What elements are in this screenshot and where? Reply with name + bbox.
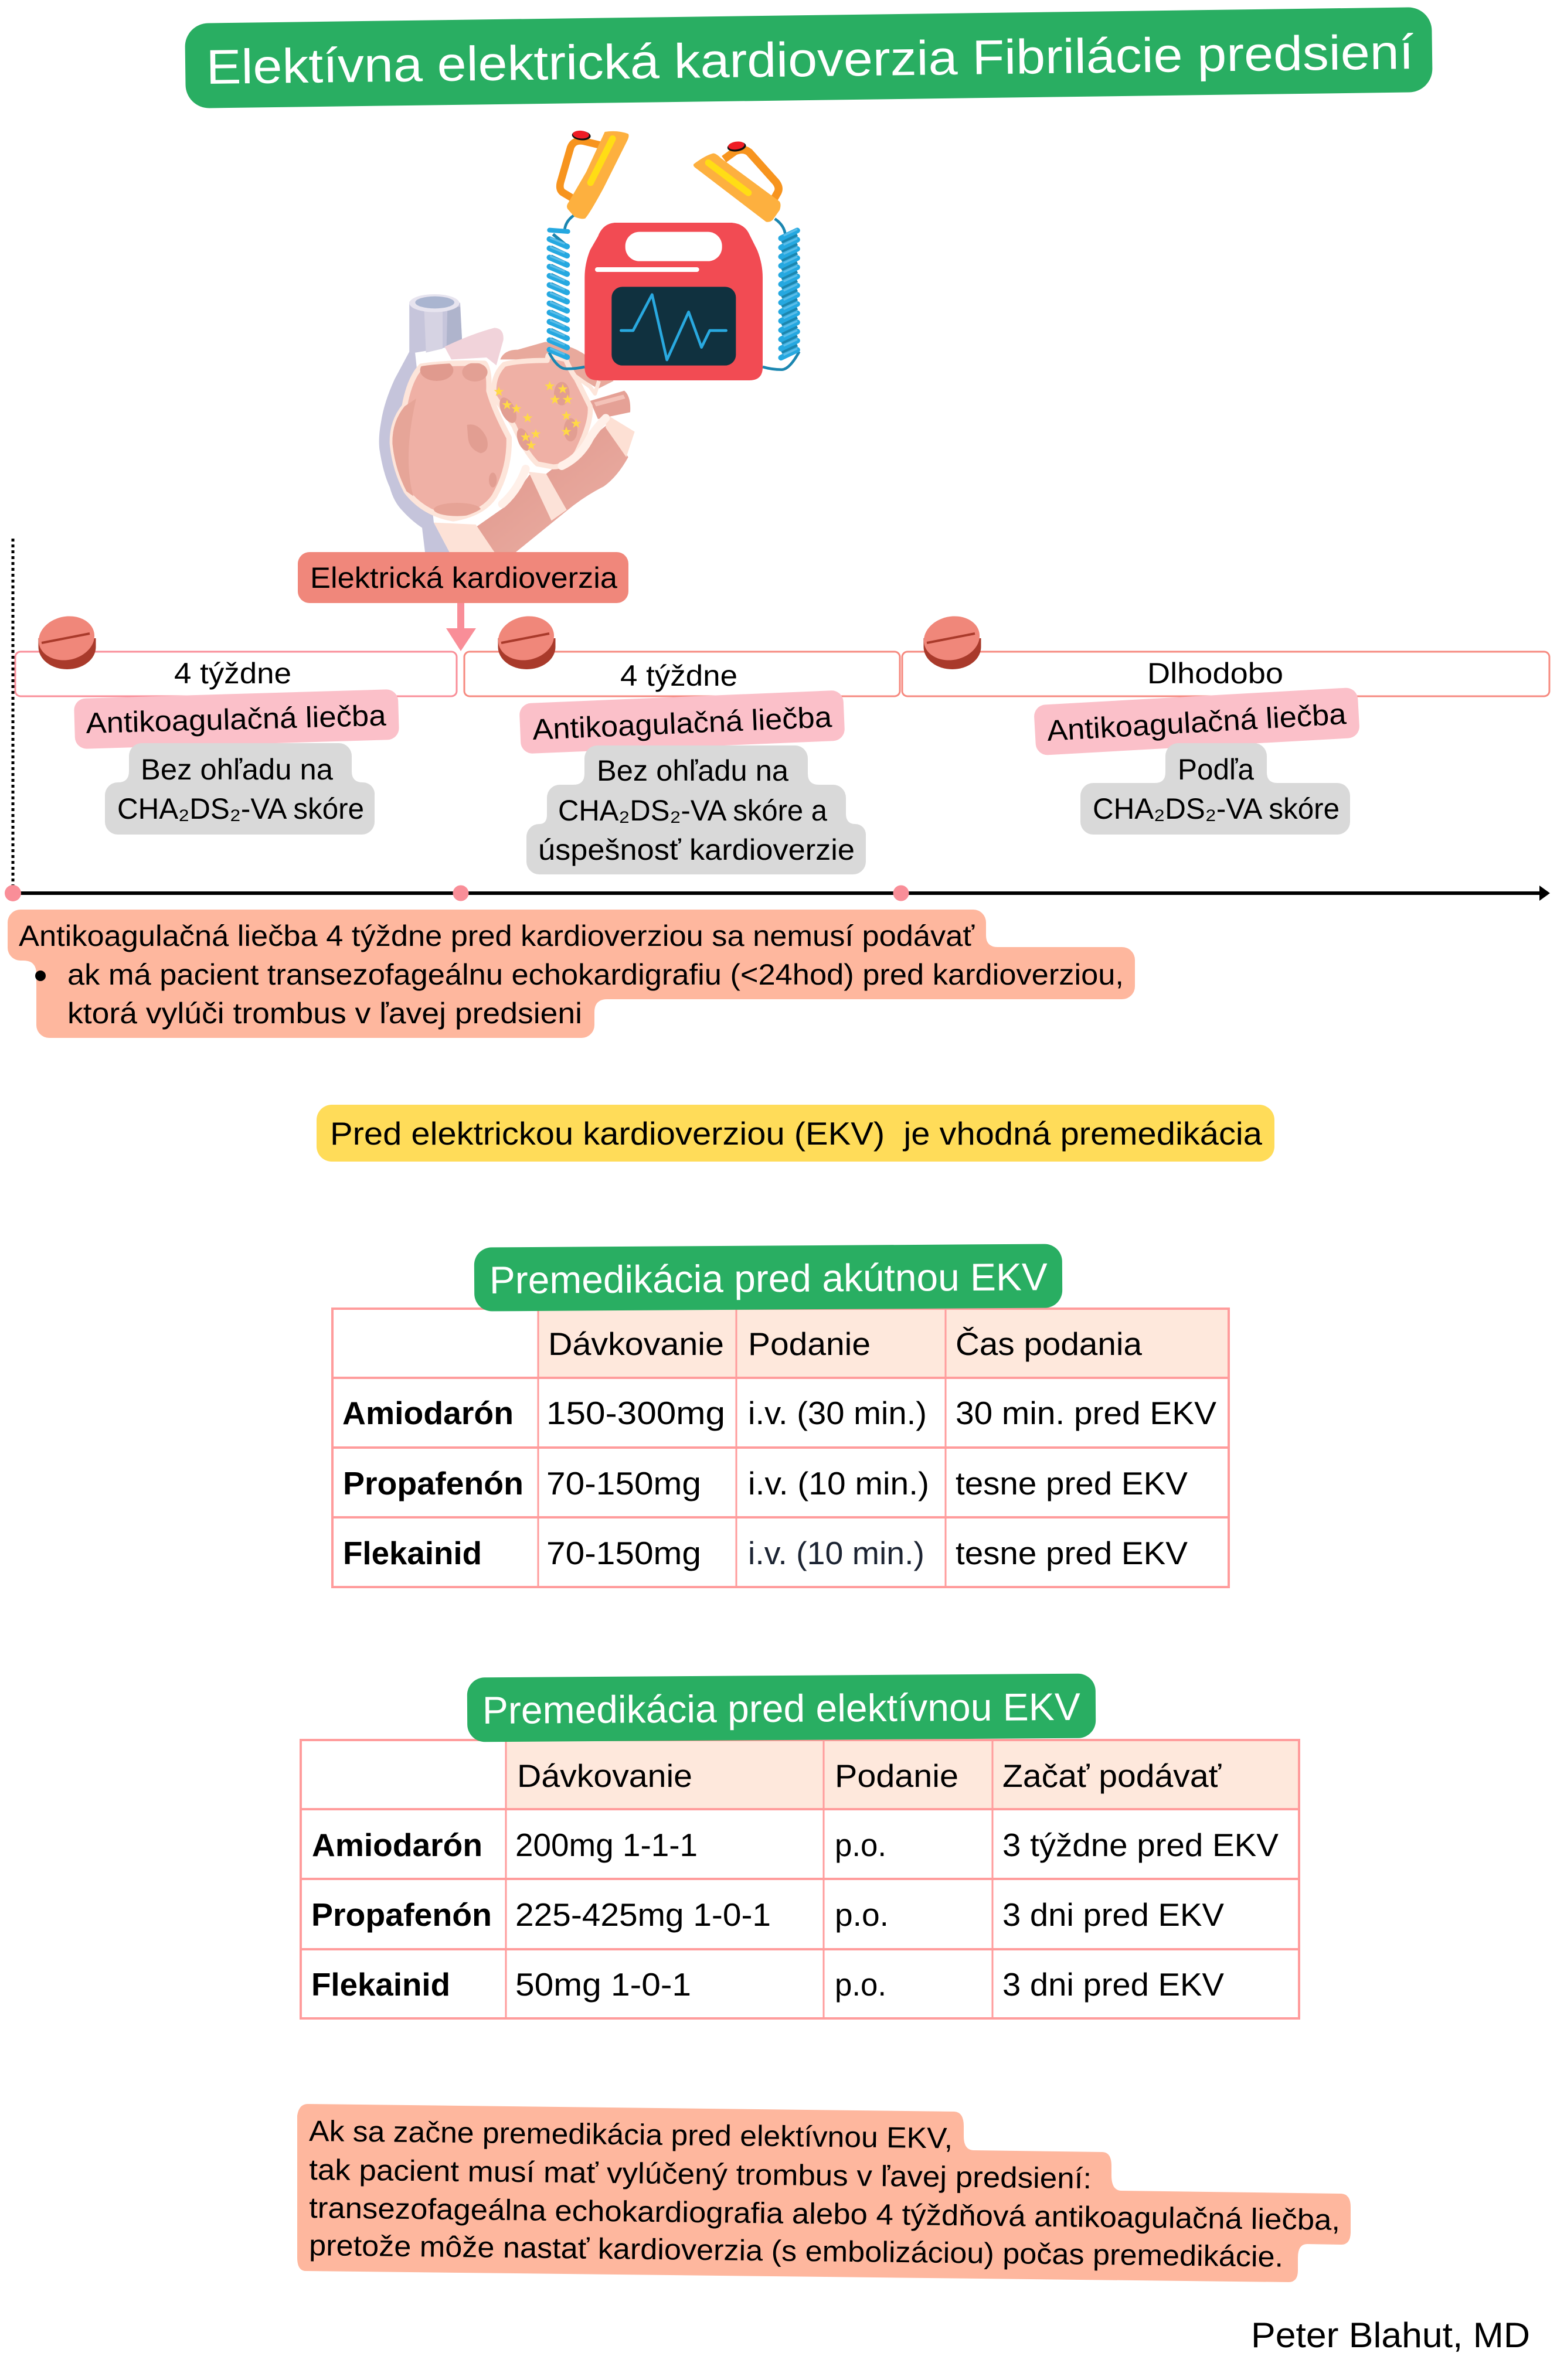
table 1 row: Flekainid: i.v. (10 min.) [748, 1535, 924, 1571]
callout: thrombus exclusion note: tak pacient musí mať vylúčený trombus v ľavej predsiení: [309, 2153, 1092, 2195]
table 1 row: Propafenón [343, 1465, 1188, 1501]
icon: defibrillator with paddles [549, 130, 799, 380]
table 2 header [517, 1758, 1222, 1794]
callout: anticoagulation exception: ktorá vylúči trombus v ľavej predsieni [67, 997, 582, 1030]
table 1 row: Flekainid: 70-150mg [546, 1535, 701, 1571]
table 2 header: Dávkovanie [517, 1758, 692, 1794]
table 1 row: Amiodarón: Amiodarón [342, 1395, 514, 1431]
label: Elektrická kardioverzia [298, 552, 628, 603]
table 2 row: Flekainid [311, 1966, 1224, 2003]
title: Elektívna elektrická kardioverzia Fibrilácie predsiení [206, 25, 1414, 94]
table 2 row: Propafenón [311, 1896, 1224, 1933]
table 1 row: Flekainid: Flekainid [343, 1535, 482, 1571]
table 2 header: Začať podávať [1002, 1758, 1222, 1794]
timeline axis [5, 539, 1550, 901]
table 2 row: Amiodarón [312, 1827, 1279, 1863]
tag: anticoagulation 2 [519, 690, 845, 754]
table 2 row: Propafenón: p.o. [835, 1896, 889, 1933]
note: grey block 2 [526, 745, 866, 874]
tag: anticoagulation 2: Antikoagulačná liečba [532, 700, 832, 746]
period box: first 4 weeks: 4 týždne [174, 657, 291, 690]
table: premedication before acute EKV [332, 1309, 1229, 1587]
table 1 row: Propafenón: i.v. (10 min.) [748, 1465, 929, 1501]
table 2 row: Amiodarón: Amiodarón [312, 1827, 482, 1863]
callout: premedication heading [317, 1105, 1274, 1162]
machine body [584, 223, 763, 380]
note: grey block 3: CHA₂DS₂-VA skóre [1093, 792, 1340, 825]
table 2 row: Flekainid: 3 dni pred EKV [1002, 1966, 1224, 2003]
icon: pill 2 [494, 611, 558, 669]
icon: pill 3 [920, 611, 984, 669]
note: grey block 2: úspešnosť kardioverzie [538, 833, 855, 866]
note: grey block 1: Bez ohľadu na [141, 753, 333, 786]
heading: acute EKV banner [474, 1244, 1062, 1312]
table 2 row: Flekainid: p.o. [835, 1966, 886, 2003]
period box: first 4 weeks [15, 652, 457, 696]
icon: heart anatomy illustration [379, 294, 635, 552]
table 1 header: Podanie [748, 1326, 871, 1362]
note: grey block 2: Bez ohľadu na [597, 754, 788, 787]
label: Elektrická kardioverzia: Elektrická kardioverzia [310, 561, 617, 594]
wires [549, 215, 799, 370]
table 2 row: Flekainid: 50mg 1-0-1 [515, 1966, 691, 2003]
table 1 row: Amiodarón [342, 1395, 1216, 1431]
note: grey block 1 [105, 743, 375, 835]
icon: pill 1 [35, 611, 98, 669]
table 1 row: Propafenón: tesne pred EKV [956, 1465, 1188, 1501]
tag: anticoagulation 3 [1034, 687, 1360, 755]
table 1 header: Čas podania [956, 1326, 1142, 1362]
note: grey block 1: CHA₂DS₂-VA skóre [117, 792, 364, 825]
table 1 row: Propafenón: 70-150mg [546, 1465, 701, 1501]
table 2 row: Propafenón: 225-425mg 1-0-1 [515, 1896, 771, 1933]
period box: long term [902, 652, 1549, 696]
table 2 row: Propafenón: 3 dni pred EKV [1002, 1896, 1224, 1933]
table 2 row: Amiodarón: p.o. [835, 1827, 886, 1863]
callout: thrombus exclusion note: Ak sa začne premedikácia pred elektívnou EKV, [309, 2115, 953, 2154]
period box: second 4 weeks: 4 týždne [620, 659, 737, 692]
note: grey block 2: CHA₂DS₂-VA skóre a [558, 794, 827, 827]
callout: anticoagulation exception: Antikoagulačná liečba 4 týždne pred kardioverziou sa nemusí podávať [19, 920, 975, 952]
callout: anticoagulation exception [8, 910, 1135, 1038]
note: grey block 3 [1080, 743, 1350, 835]
callout: premedication heading: Pred elektrickou kardioverziou (EKV) je vhodná premedikácia [330, 1115, 1262, 1152]
callout: thrombus exclusion note [297, 2104, 1351, 2282]
table 2 row: Flekainid: Flekainid [311, 1966, 450, 2003]
arrow: cardioversion to timeline [446, 603, 476, 651]
table 1 row: Flekainid: tesne pred EKV [956, 1535, 1188, 1571]
table 2 row: Amiodarón: 200mg 1-1-1 [515, 1827, 698, 1863]
right coil [781, 229, 797, 357]
callout: thrombus exclusion note: pretože môže nastať kardioverzia (s embolizáciou) počas premedikácie. [309, 2229, 1283, 2273]
table 2 header: Podanie [835, 1758, 958, 1794]
callout: anticoagulation exception: ak má pacient transezofageálnu echokardigrafiu (<24hod) pred kardioverziou, [67, 958, 1124, 991]
left paddle [560, 130, 629, 219]
callout: thrombus exclusion note: transezofageálna echokardiografia alebo 4 týždňová antikoagulačná liečba, [309, 2191, 1340, 2236]
heading: acute EKV banner: Premedikácia pred akútnou EKV [489, 1255, 1048, 1302]
period box: second 4 weeks [464, 652, 900, 696]
tag: anticoagulation 3: Antikoagulačná liečba [1046, 697, 1347, 747]
table 1 row: Amiodarón: i.v. (30 min.) [748, 1395, 927, 1431]
table 1 row: Amiodarón: 150-300mg [546, 1395, 725, 1431]
monitor [611, 287, 736, 366]
heading: elective EKV banner: Premedikácia pred elektívnou EKV [482, 1685, 1080, 1732]
note: grey block 3: Podľa [1178, 753, 1254, 786]
table 1 header [548, 1326, 1142, 1362]
tag: anticoagulation 1 [74, 689, 399, 749]
author credit: Peter Blahut, MD [1251, 2316, 1530, 2355]
table 1 row: Flekainid [343, 1535, 1188, 1571]
period box: long term: Dlhodobo [1147, 657, 1283, 690]
table 2 row: Amiodarón: 3 týždne pred EKV [1002, 1827, 1279, 1863]
tag: anticoagulation 1: Antikoagulačná liečba [86, 699, 386, 740]
table 1 header: Dávkovanie [548, 1326, 724, 1362]
table: premedication before elective EKV [301, 1740, 1299, 2018]
left coil [549, 230, 568, 357]
heading: elective EKV banner [467, 1674, 1096, 1742]
right paddle [693, 141, 781, 222]
table 1 row: Propafenón: Propafenón [343, 1465, 523, 1501]
table 1 row: Amiodarón: 30 min. pred EKV [956, 1395, 1216, 1431]
title [185, 7, 1433, 108]
table 2 row: Propafenón: Propafenón [311, 1896, 492, 1933]
